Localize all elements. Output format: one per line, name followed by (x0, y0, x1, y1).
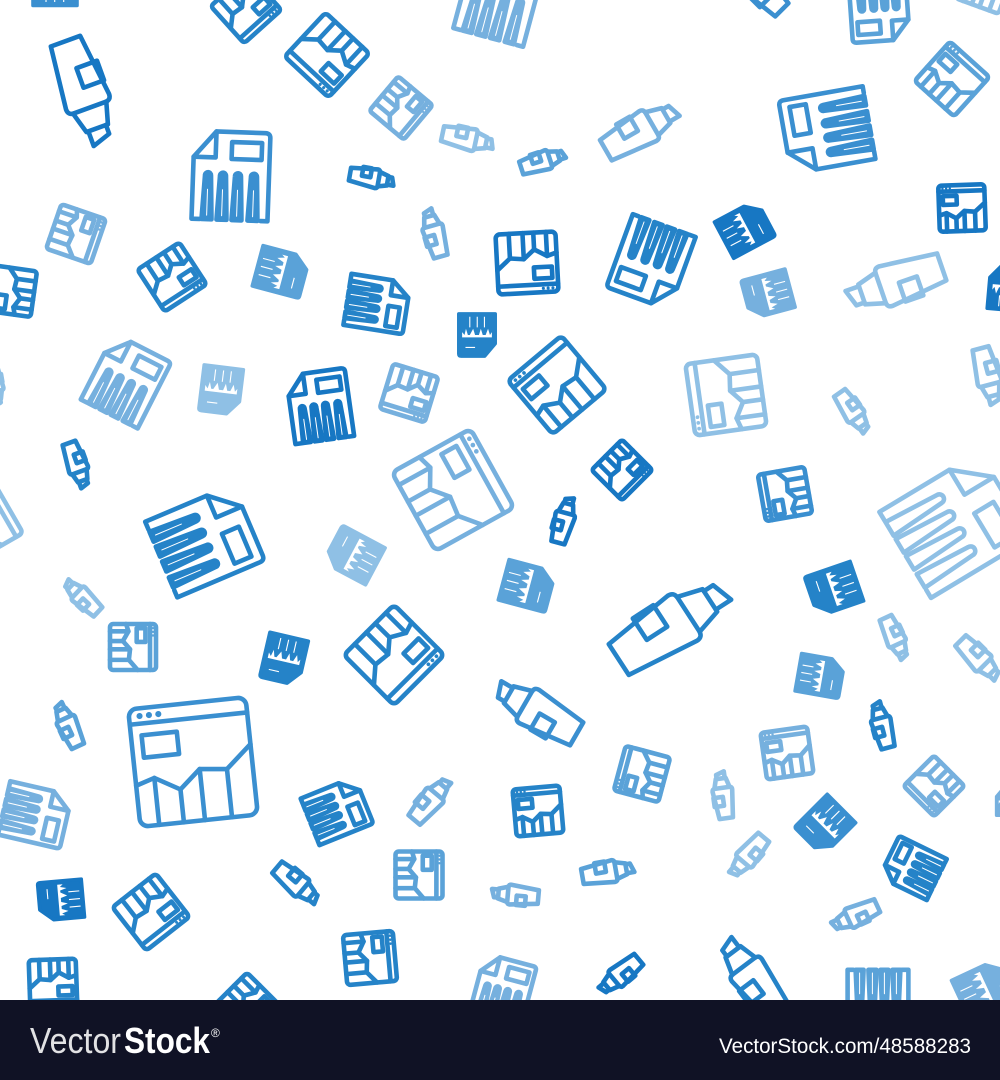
icon: sd card (191, 131, 271, 221)
icon: filled card sliver (987, 264, 1000, 312)
icon: marker (518, 145, 568, 177)
icon: window chart (112, 873, 190, 951)
icon: sd card (879, 836, 947, 900)
icon: sd card (145, 485, 265, 597)
icon: window chart (513, 786, 563, 836)
icon: marker (828, 896, 882, 936)
icon: marker (724, 831, 772, 881)
icon: marker sliver (0, 363, 6, 407)
icon: sd card (81, 334, 171, 428)
image id: VectorStock.com/48588283 (719, 1035, 971, 1058)
icon: window chart (137, 242, 207, 312)
icon: window chart (29, 959, 77, 1007)
icon: window chart (508, 336, 606, 434)
icon: marker (49, 700, 87, 750)
icon: filled card (498, 560, 556, 612)
icon: marker (491, 883, 539, 907)
icon: filled card (804, 561, 864, 617)
icon: window chart (344, 605, 444, 705)
icon: marker (270, 859, 324, 909)
icon: marker (953, 633, 1000, 685)
icon: marker (580, 857, 636, 887)
icon: window chart (685, 354, 767, 436)
icon: filled card (260, 632, 308, 686)
icon: sliver right edge (997, 789, 1000, 815)
icon: window chart (392, 429, 514, 551)
icon: filled card (252, 246, 310, 298)
icon: window chart (285, 13, 369, 97)
icon: window chart (211, 0, 281, 43)
icon: marker (417, 207, 451, 259)
icon: window chart (369, 76, 433, 140)
icon: filled card (714, 200, 776, 258)
icon: window chart (592, 440, 652, 500)
icon: marker (348, 165, 396, 191)
icon: sd card (606, 214, 696, 310)
icon: marker (44, 33, 124, 151)
icon: marker (548, 495, 580, 545)
icon: sd card (848, 970, 908, 1040)
icon: marker (831, 387, 875, 437)
icon: window chart (758, 467, 812, 521)
icon: sd card (469, 953, 537, 1027)
logo: ® (211, 1026, 220, 1040)
icon: sd card (779, 86, 875, 174)
icon: window chart (915, 42, 989, 116)
icon: marker (595, 951, 645, 999)
icon: marker (866, 700, 898, 750)
icon: marker (597, 95, 685, 165)
icon: sd card (848, 0, 910, 43)
icon: window chart sliver (0, 481, 23, 563)
icon: sd card (879, 452, 1000, 598)
icon: marker (604, 568, 740, 682)
logo: Vector (30, 1020, 121, 1061)
icon: filled card (741, 269, 795, 319)
icon: marker (877, 614, 913, 662)
icon: window chart (495, 231, 559, 295)
icon: window chart (396, 852, 442, 898)
icon: filled card (459, 314, 495, 356)
icon: marker (406, 773, 456, 827)
icon: marker (841, 247, 949, 319)
icon: window chart (380, 364, 438, 422)
icon: window chart (343, 931, 397, 985)
footer bar (0, 1000, 1000, 1080)
icon: sd card (286, 368, 354, 444)
icon: filled card (37, 879, 85, 921)
icon: marker (710, 770, 736, 820)
icon: window chart (0, 265, 37, 317)
icon: sd card (343, 274, 411, 334)
icon: marker (710, 930, 794, 1024)
icon: marker (727, 0, 791, 19)
icon: sliver top left (33, 0, 77, 6)
icon: window chart (938, 184, 986, 232)
icon: sd card (0, 781, 72, 849)
icon: marker (60, 440, 94, 490)
icon: window chart (956, 0, 1000, 14)
icon: sd card (301, 777, 373, 845)
icon: window chart (110, 624, 156, 670)
icon: window chart (760, 726, 814, 780)
logo: Stock (124, 1020, 211, 1061)
icon: marker (969, 345, 1000, 407)
icon: filled card (323, 525, 385, 585)
icon: marker (488, 671, 586, 751)
icon: sd card (453, 0, 545, 47)
icon: window chart (212, 973, 282, 1043)
icon: window chart (46, 204, 106, 264)
icon: filled card (794, 794, 856, 856)
icon: filled card (951, 958, 1000, 1022)
logo (30, 1020, 220, 1061)
icon: window chart (614, 746, 670, 802)
icon: filled card (199, 365, 243, 415)
icon: window chart (904, 756, 964, 816)
icon: filled card (795, 653, 845, 699)
icon: marker (440, 123, 496, 155)
icon: marker (60, 575, 104, 619)
icon: window chart large (128, 697, 258, 827)
